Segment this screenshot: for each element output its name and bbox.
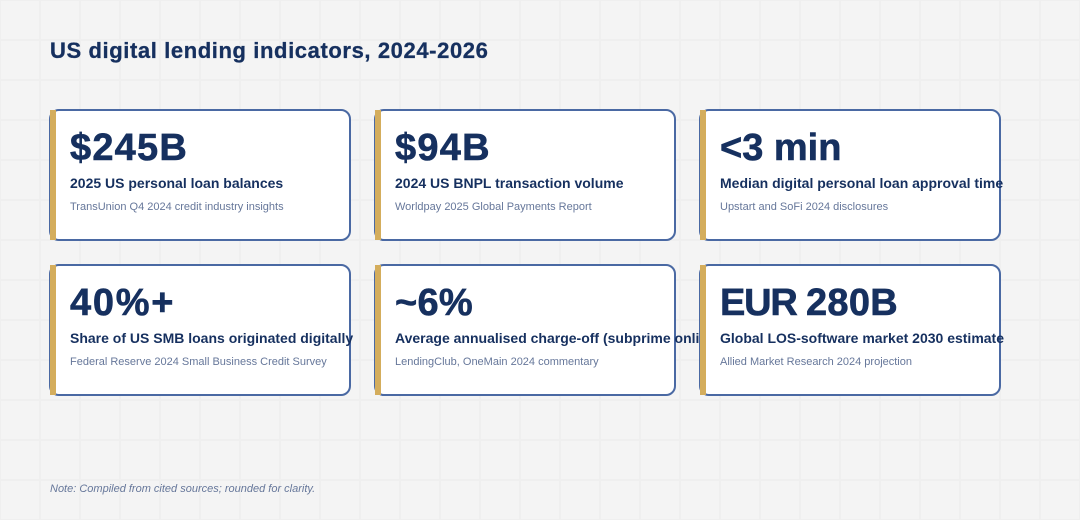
stat value: $94B — [395, 127, 491, 169]
stat source: TransUnion Q4 2024 credit industry insights — [70, 201, 284, 213]
panel: LOS software market — [699, 264, 1001, 396]
accent bar — [700, 110, 706, 240]
stat label: Share of US SMB loans originated digitally — [70, 330, 353, 346]
stat label: Global LOS-software market 2030 estimate — [720, 330, 1004, 346]
panel: personal loan balances — [49, 109, 351, 241]
accent bar — [700, 265, 706, 395]
stat value: ~6% — [395, 282, 473, 324]
stat source: LendingClub, OneMain 2024 commentary — [395, 356, 599, 368]
panel: BNPL volume — [374, 109, 676, 241]
stat source: Allied Market Research 2024 projection — [720, 356, 912, 368]
accent bar — [50, 110, 56, 240]
stat label: 2024 US BNPL transaction volume — [395, 175, 623, 191]
panel: SMB loans — [49, 264, 351, 396]
stat value: EUR 280B — [720, 282, 898, 324]
stat label: Average annualised charge-off (subprime online) — [395, 330, 720, 346]
accent bar — [375, 110, 381, 240]
stat source: Federal Reserve 2024 Small Business Credit Survey — [70, 356, 327, 368]
stat label: Median digital personal loan approval time — [720, 175, 1003, 191]
stat value: $245B — [70, 127, 188, 169]
panel: charge-off — [374, 264, 676, 396]
footnote: Note: Compiled from cited sources; rounded for clarity. — [50, 483, 315, 495]
stat value: <3 min — [720, 127, 841, 169]
stat source: Worldpay 2025 Global Payments Report — [395, 201, 592, 213]
accent bar — [375, 265, 381, 395]
stat source: Upstart and SoFi 2024 disclosures — [720, 201, 888, 213]
stat value: 40%+ — [70, 282, 175, 324]
panel: approval time — [699, 109, 1001, 241]
accent bar — [50, 265, 56, 395]
title: US digital lending indicators, 2024-2026 — [50, 38, 488, 63]
stat label: 2025 US personal loan balances — [70, 175, 283, 191]
